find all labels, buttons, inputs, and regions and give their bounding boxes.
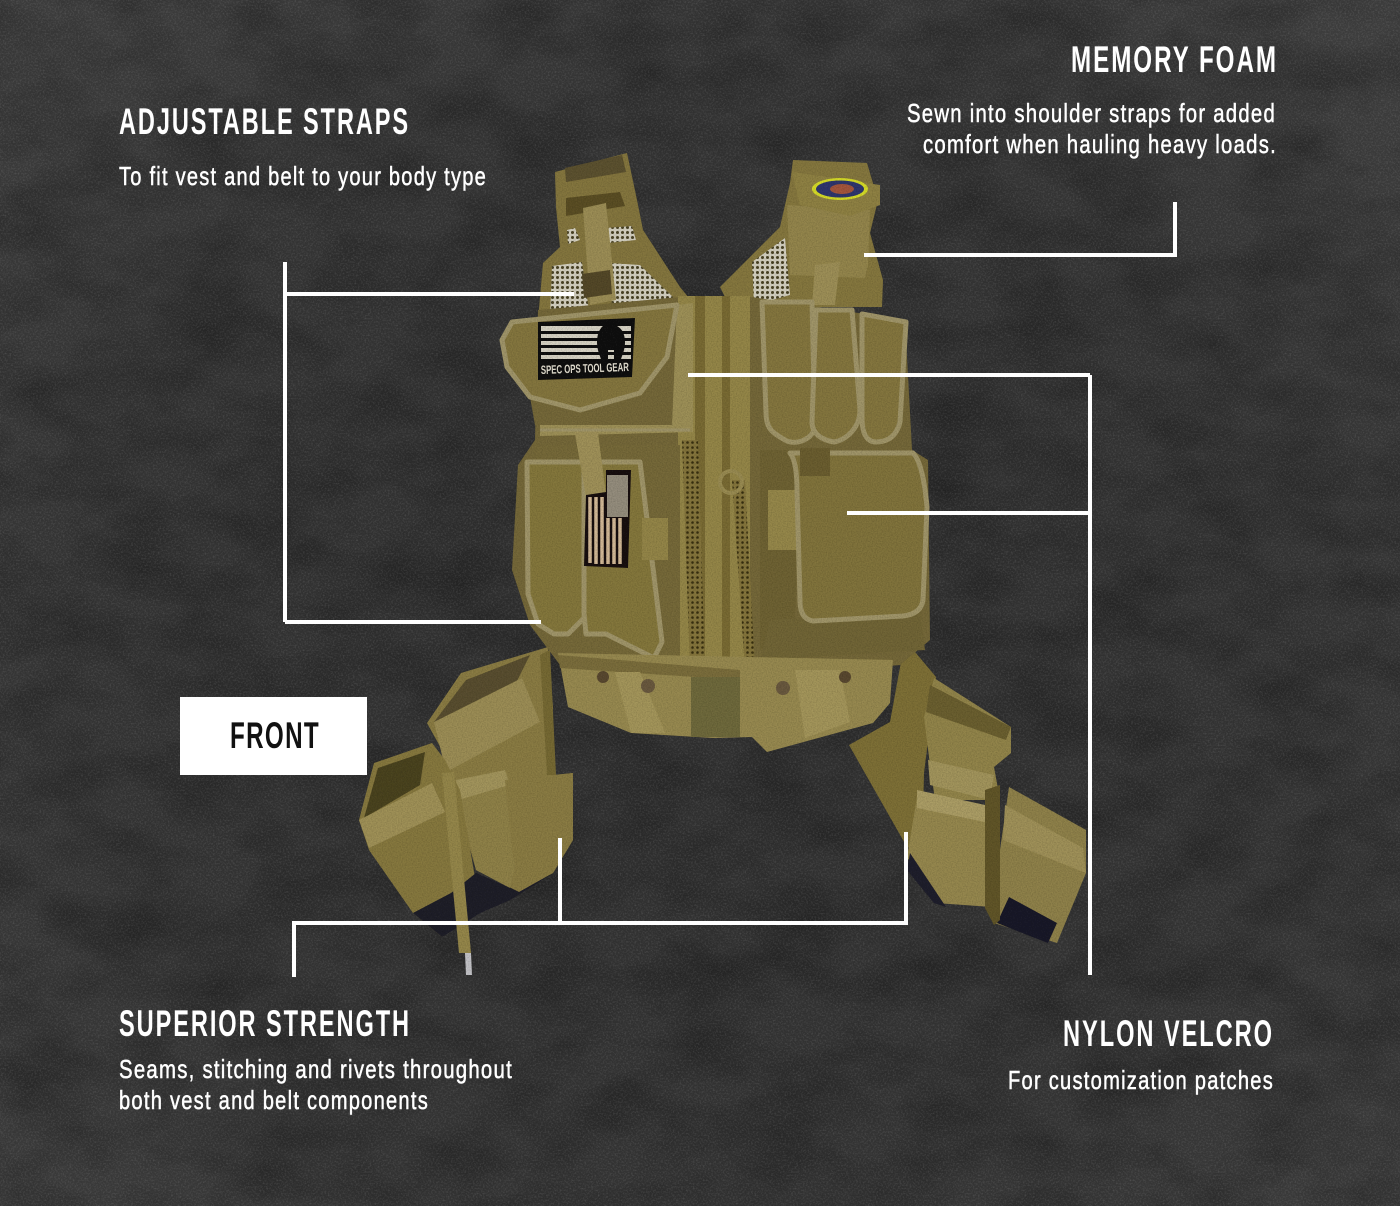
patch: colourful oval on shoulder xyxy=(812,178,868,200)
text block: adjustable straps xyxy=(119,101,487,191)
upper left pouch with flap xyxy=(502,303,693,436)
heading: superior strength: SUPERIOR STRENGTH xyxy=(119,1003,411,1044)
front label box xyxy=(180,697,367,775)
description: superior strength: Seams, stitching and rivets throughout xyxy=(119,1054,513,1084)
text block: memory foam xyxy=(907,39,1278,159)
text block: superior strength xyxy=(119,1003,513,1115)
callout lines: adjustable straps xyxy=(285,262,574,622)
description: memory foam: Sewn into shoulder straps for added xyxy=(907,98,1276,128)
heading: adjustable straps: ADJUSTABLE STRAPS xyxy=(119,101,410,142)
magazine pouches xyxy=(762,302,906,442)
shoulder straps with mesh xyxy=(538,153,883,320)
description: memory foam xyxy=(907,98,1277,159)
description: nylon velcro: For customization patches xyxy=(1008,1065,1274,1095)
patch: Spec Ops Tool Gear: SPEC OPS TOOL GEAR xyxy=(541,360,629,377)
main vest body xyxy=(512,296,930,680)
lower right velcro flap pouch xyxy=(760,448,927,660)
tool belt with buckle xyxy=(558,653,893,752)
callout lines: superior strength xyxy=(292,832,908,977)
vest and belt product photo illustration xyxy=(359,153,1086,975)
description: memory foam: comfort when hauling heavy loads. xyxy=(923,129,1277,159)
patch: Spec Ops Tool Gear xyxy=(538,318,635,380)
heading: memory foam: MEMORY FOAM xyxy=(1071,39,1278,80)
callout lines: memory foam xyxy=(864,202,1175,257)
description: superior strength xyxy=(119,1054,513,1115)
hanging strap with clip xyxy=(442,772,472,975)
right strap and pouches of tool belt xyxy=(849,640,1086,943)
left pouches of tool belt xyxy=(359,647,573,937)
patch: reversed US flag xyxy=(584,470,631,568)
lower left pouches with velcro xyxy=(527,425,690,660)
front label box: FRONT xyxy=(230,715,320,756)
heading: nylon velcro: NYLON VELCRO xyxy=(1063,1013,1274,1054)
text block: nylon velcro xyxy=(1008,1013,1274,1095)
description: adjustable straps: To fit vest and belt to your body type xyxy=(119,161,487,191)
description: superior strength: both vest and belt components xyxy=(119,1085,429,1115)
callout lines: nylon velcro xyxy=(688,375,1090,975)
